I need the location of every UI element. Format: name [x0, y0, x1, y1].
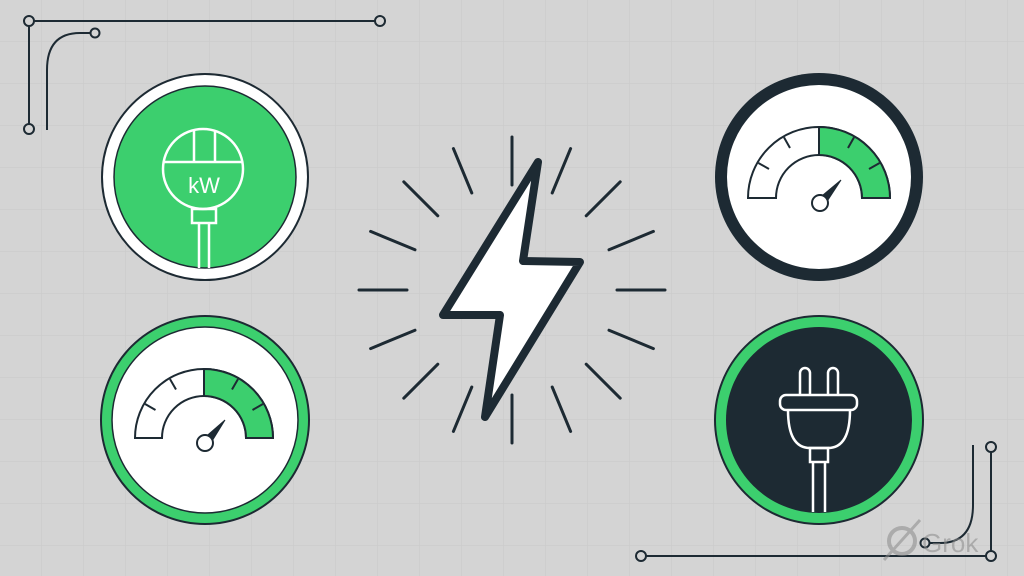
icon: gauge circle (bottom-left) — [101, 316, 309, 524]
watermark: Grok — [884, 520, 979, 560]
icon: lightning bolt — [443, 162, 580, 417]
icon: kW meter circle (top-left): kW — [188, 173, 220, 198]
circuit decoration: top-left — [24, 16, 385, 134]
icon: kW meter circle (top-left) — [102, 74, 308, 280]
circuit decoration: bottom-right — [636, 442, 996, 561]
icon: radiating rays — [359, 137, 665, 443]
watermark: Grok: Grok — [922, 528, 979, 558]
icon: gauge circle dark ring (top-right) — [715, 73, 923, 281]
icon: plug circle (bottom-right) — [715, 316, 923, 524]
